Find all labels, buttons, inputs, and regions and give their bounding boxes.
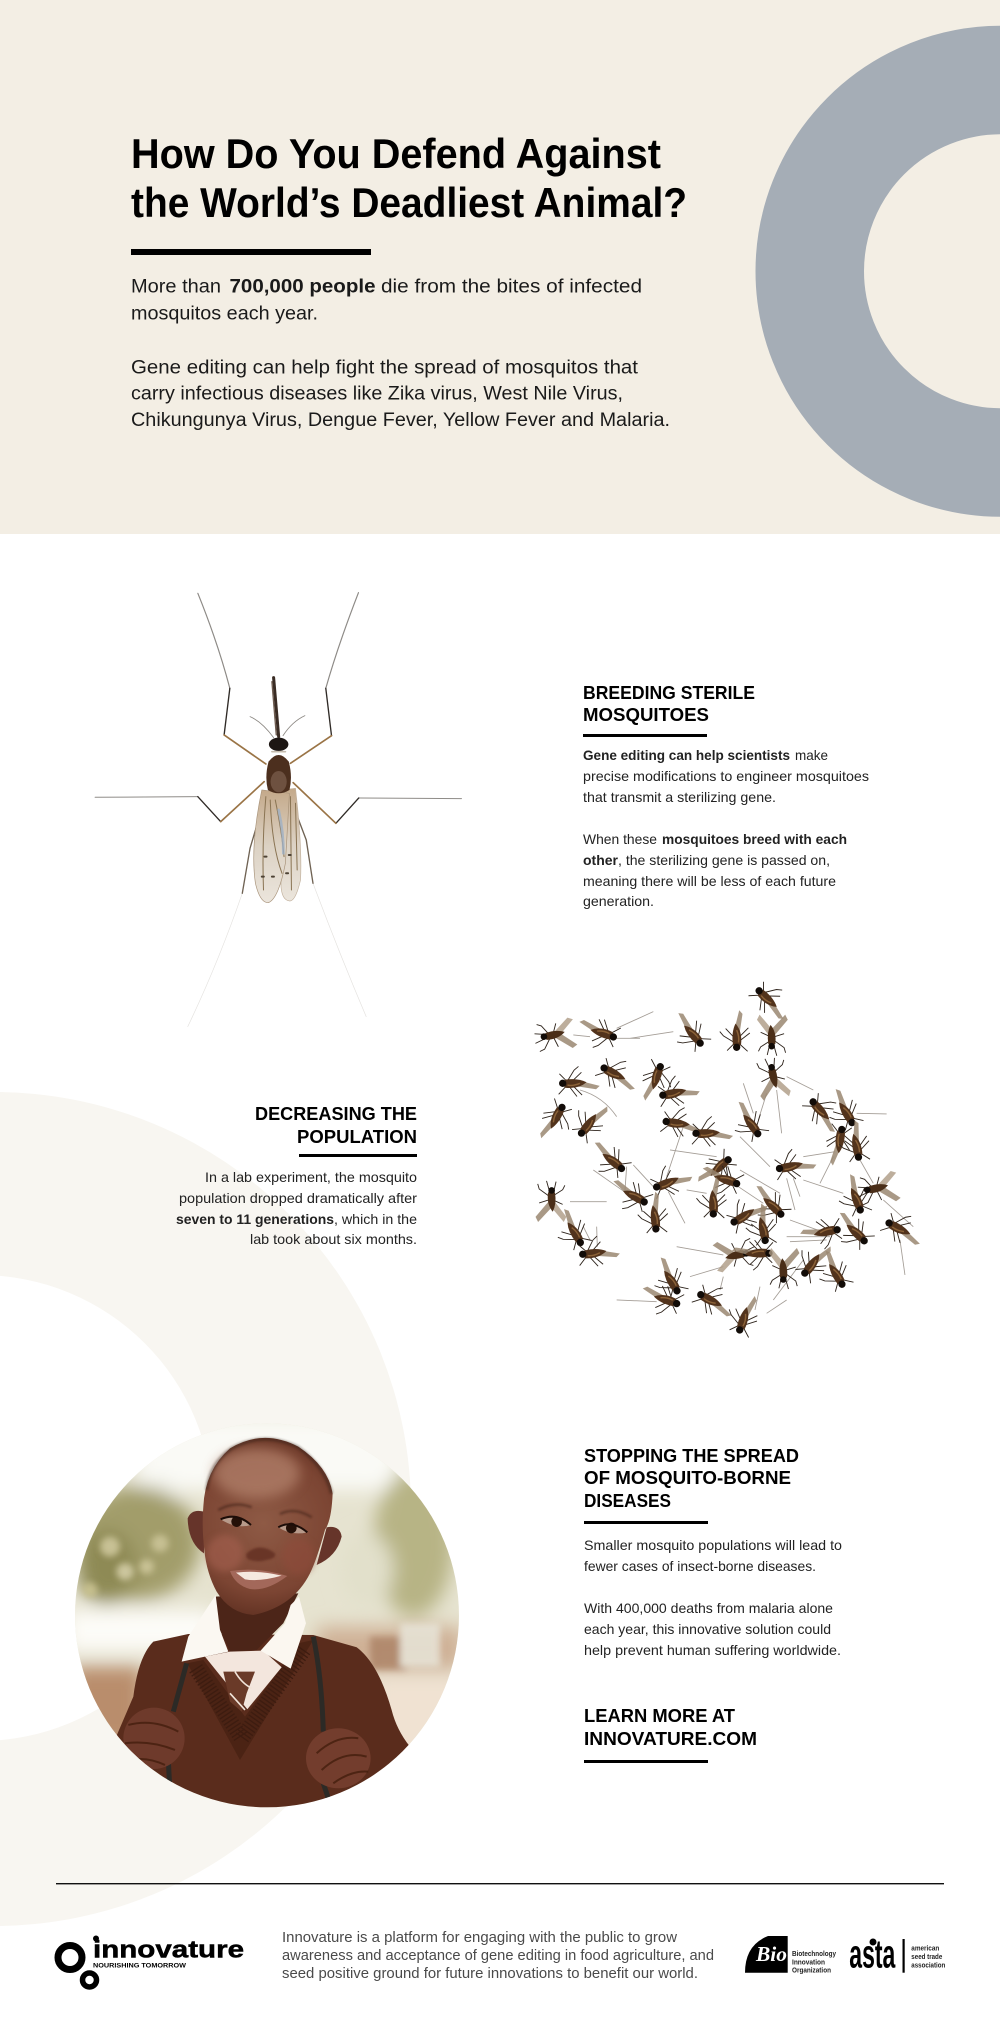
title rule <box>131 249 371 255</box>
head <box>203 1438 333 1615</box>
text: stopping the spread: Smaller mosquito populations will lead to <box>584 1537 842 1553</box>
logo: asta: association <box>911 1961 946 1970</box>
text: breeding sterile mosquitoes: other <box>583 852 619 868</box>
text: decreasing the population <box>176 1103 417 1247</box>
call to action: LEARN MORE AT <box>584 1705 736 1726</box>
logo: bio: Organization <box>792 1965 831 1974</box>
footer description: seed positive ground for future innovations to benefit our world. <box>282 1966 698 1982</box>
straps <box>168 1637 328 1798</box>
footer description <box>282 1930 714 1982</box>
nose <box>246 1547 275 1561</box>
pale background ring <box>0 1092 411 1926</box>
call to action: INNOVATURE.COM <box>584 1728 757 1749</box>
logo: bio: Innovation <box>792 1957 825 1966</box>
intro text <box>131 276 670 431</box>
logo: asta: asta <box>849 1933 896 1977</box>
text: breeding sterile mosquitoes: that transmit a sterilizing gene. <box>583 789 776 805</box>
text: breeding sterile mosquitoes: mosquitoes breed with each <box>662 831 847 847</box>
sweater <box>113 1634 410 1817</box>
decorative grey ring <box>810 80 1000 463</box>
text: breeding sterile mosquitoes: MOSQUITOES <box>583 704 709 725</box>
shirt <box>205 1651 282 1709</box>
neck <box>215 1593 298 1652</box>
logo: bio <box>745 1936 837 1974</box>
text: breeding sterile mosquitoes: , the sterilizing gene is passed on, <box>618 852 830 868</box>
title: How Do You Defend Against <box>131 130 661 177</box>
text: stopping the spread: OF MOSQUITO-BORNE <box>584 1467 791 1488</box>
text: stopping the spread: each year, this innovative solution could <box>584 1621 831 1637</box>
intro text: 700,000 people <box>230 276 376 297</box>
intro text: Chikungunya Virus, Dengue Fever, Yellow Fever and Malaria. <box>131 410 670 431</box>
text: breeding sterile mosquitoes: make <box>795 747 828 763</box>
tie <box>223 1672 255 1712</box>
text: decreasing the population: POPULATION <box>297 1126 417 1147</box>
logo: asta: seed trade <box>911 1952 942 1961</box>
text: breeding sterile mosquitoes: Gene editing can help scientists <box>583 747 790 763</box>
logo: innovature <box>58 1936 244 1987</box>
text: breeding sterile mosquitoes: When these <box>583 831 657 847</box>
smile <box>230 1570 287 1589</box>
intro text: mosquitos each year. <box>131 304 318 325</box>
intro text: Gene editing can help fight the spread of mosquitos that <box>131 358 639 378</box>
text: stopping the spread: STOPPING THE SPREAD <box>584 1445 799 1466</box>
text: decreasing the population: DECREASING THE <box>255 1103 417 1124</box>
text: stopping the spread: With 400,000 deaths from malaria alone <box>584 1600 833 1616</box>
header background panel <box>0 0 1000 534</box>
text: stopping the spread: help prevent human suffering worldwide. <box>584 1642 841 1658</box>
text: breeding sterile mosquitoes: precise modifications to engineer mosquitoes <box>583 768 869 784</box>
illustration: single mosquito <box>95 593 461 1027</box>
hands <box>123 1708 371 1788</box>
text: stopping the spread: DISEASES <box>584 1490 671 1511</box>
logo: bio: Biotechnology <box>792 1949 837 1958</box>
photo: smiling schoolboy in a circle <box>75 1435 459 1808</box>
text: decreasing the population: population dropped dramatically after <box>179 1190 417 1206</box>
collar <box>182 1595 228 1662</box>
intro text: die from the bites of infected <box>381 276 642 297</box>
text: stopping the spread <box>584 1445 842 1658</box>
brows and eyes <box>218 1505 312 1517</box>
text: breeding sterile mosquitoes: meaning there will be less of each future <box>583 873 836 889</box>
footer description: awareness and acceptance of gene editing in food agriculture, and <box>282 1948 714 1964</box>
illustration: swarm of dead mosquitoes <box>532 976 930 1338</box>
logo: innovature: innovature <box>93 1936 244 1963</box>
call to action <box>584 1705 757 1763</box>
intro text: More than <box>131 276 221 297</box>
ribbed v-neck <box>187 1640 313 1760</box>
ears <box>188 1511 204 1553</box>
text: decreasing the population: In a lab experiment, the mosquito <box>205 1169 417 1185</box>
footer description: Innovature is a platform for engaging with the public to grow <box>282 1930 678 1946</box>
title <box>131 130 687 226</box>
intro text: carry infectious diseases like Zika virus, West Nile Virus, <box>131 384 623 404</box>
logo: bio: Bio <box>755 1942 787 1966</box>
text: breeding sterile mosquitoes: BREEDING STERILE <box>583 682 755 703</box>
text: breeding sterile mosquitoes: generation. <box>583 893 654 909</box>
text: decreasing the population: lab took about six months. <box>250 1231 417 1247</box>
text: breeding sterile mosquitoes <box>583 682 869 909</box>
text: decreasing the population: seven to 11 generations <box>176 1211 334 1227</box>
text: decreasing the population: , which in the <box>334 1211 417 1227</box>
logo: asta: american <box>911 1944 940 1953</box>
text: stopping the spread: fewer cases of insect-borne diseases. <box>584 1558 816 1574</box>
logo: innovature: NOURISHING TOMORROW <box>93 1963 187 1970</box>
title: the World’s Deadliest Animal? <box>131 179 687 226</box>
